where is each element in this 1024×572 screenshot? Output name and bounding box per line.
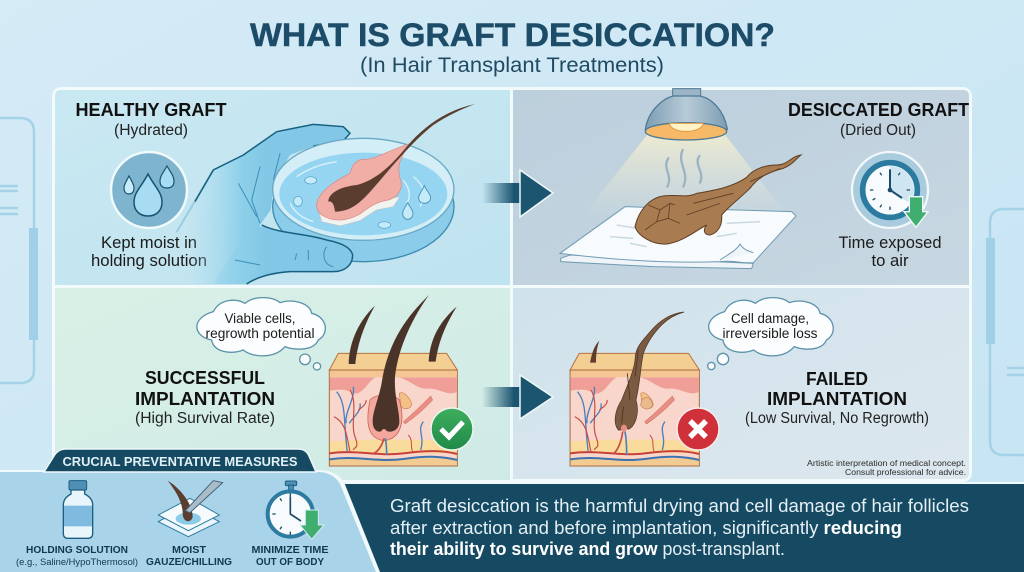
label: moist gauze (146, 544, 232, 568)
illustration: healthy skin cross-section (329, 295, 457, 466)
heading: healthy graft: HEALTHY GRAFT (76, 99, 227, 120)
heading: successful implantation: (High Survival Rate) (135, 410, 275, 427)
icon: moist gauze with tweezers (158, 481, 223, 537)
heading: desiccated graft: DESICCATED GRAFT (788, 99, 970, 120)
label: moist gauze: MOIST (172, 544, 207, 556)
text: kept moist (91, 234, 207, 270)
icon: holding solution bottle (63, 481, 93, 538)
callout: cell damage: irreversible loss (722, 326, 818, 341)
tab: preventative measures heading (44, 449, 316, 472)
heading: healthy graft: (Hydrated) (114, 122, 188, 139)
label: moist gauze: GAUZE/CHILLING (146, 556, 232, 568)
icon: stopwatch with arrow (268, 481, 324, 539)
callout: cell damage: Cell damage, (731, 311, 809, 326)
illustration: damaged skin cross-section (570, 312, 699, 466)
label: holding solution: (e.g., Saline/HypoThermosol) (16, 557, 138, 568)
illustration: gloved hand holding petri dish (175, 104, 475, 284)
icon: red cross (677, 408, 719, 450)
subtitle: (In Hair Transplant Treatments) (360, 54, 664, 77)
text: kept moist: holding solution (91, 252, 207, 270)
left side decoration (0, 118, 38, 383)
heading: failed implantation: FAILED (806, 368, 868, 389)
arrow: healthy to desiccated (482, 170, 553, 217)
icon: clock with down arrow (852, 152, 928, 228)
disclaimer (807, 459, 966, 477)
panel: preventative measures (0, 449, 380, 572)
text: time exposed: to air (872, 252, 909, 270)
disclaimer: Artistic interpretation of medical concept. (807, 459, 966, 468)
panel: definition band: after extraction and before implantation, significantly reducing (390, 518, 902, 538)
label: holding solution: HOLDING SOLUTION (26, 544, 128, 556)
disclaimer: Consult professional for advice. (845, 468, 966, 477)
icon: water drops (111, 152, 187, 228)
heading: successful implantation: SUCCESSFUL (145, 367, 265, 388)
label: minimize time: MINIMIZE TIME (252, 544, 328, 556)
title: WHAT IS GRAFT DESICCATION? (250, 17, 775, 53)
heading: desiccated graft: (Dried Out) (840, 122, 916, 139)
callout: viable cells (197, 298, 325, 370)
heading: healthy graft (76, 99, 227, 139)
heading: failed implantation: IMPLANTATION (767, 388, 907, 409)
callout: cell damage (708, 298, 833, 370)
panel: definition band: their ability to survive and grow post-transplant. (390, 539, 785, 559)
label: holding solution (16, 544, 138, 568)
right side decoration (986, 209, 1024, 455)
text: time exposed: Time exposed (838, 234, 942, 252)
text: kept moist: Kept moist in (101, 234, 197, 252)
label: minimize time: OUT OF BODY (256, 556, 324, 568)
panel: comparison card (52, 87, 972, 482)
panel: definition band (338, 482, 1024, 572)
illustration: heat lamp over dried graft (560, 89, 801, 269)
tab: preventative measures heading: CRUCIAL PREVENTATIVE MEASURES (62, 455, 298, 469)
text: time exposed (838, 234, 942, 270)
heading: successful implantation (135, 367, 275, 427)
panel: definition band: Graft desiccation is the harmful drying and cell damage of hair follicles (390, 496, 969, 516)
heading: failed implantation: (Low Survival, No Regrowth) (745, 410, 929, 427)
arrow: successful to failed (482, 375, 553, 419)
callout: viable cells: Viable cells, (224, 311, 296, 326)
heading: failed implantation (745, 368, 929, 427)
heading: desiccated graft (788, 99, 970, 139)
icon: green check (431, 408, 473, 450)
label: minimize time (252, 544, 328, 568)
callout: viable cells: regrowth potential (206, 326, 314, 341)
heading: successful implantation: IMPLANTATION (135, 388, 275, 409)
